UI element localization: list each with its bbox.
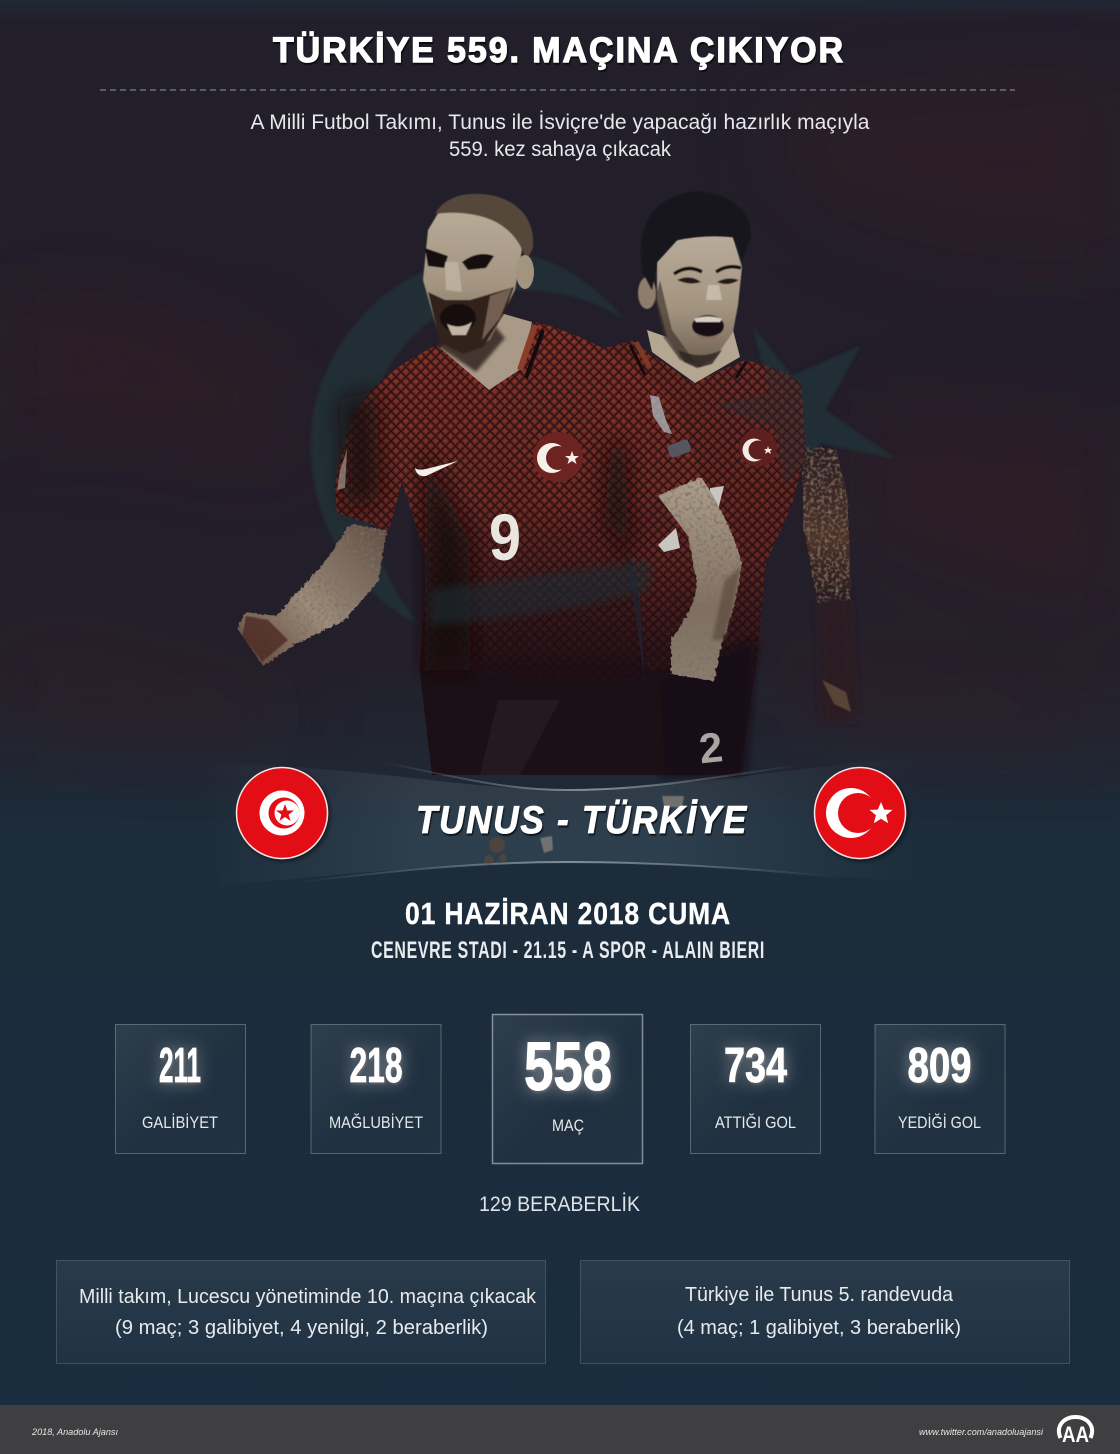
info panel: Lucescu record: Milli takım, Lucescu yönetiminde 10. maçına çıkacak: [79, 1286, 537, 1308]
info panel: Türkiye vs Tunisia record: (4 maç; 1 galibiyet, 3 beraberlik): [677, 1317, 961, 1339]
eye sockets: [425, 248, 494, 270]
player: front player: [237, 194, 742, 775]
subtitle: [250, 111, 870, 161]
beard and jaw shadow: [428, 287, 514, 354]
match heading: TUNUS - TÜRKİYE: [416, 799, 748, 842]
copyright: 2018, Anadolu Ajansı: [31, 1427, 118, 1438]
back player neck: [647, 330, 740, 383]
stat card: losses: MAĞLUBİYET: [329, 1113, 423, 1132]
stat card: goals scored: 734: [724, 1039, 787, 1093]
subtitle: A Milli Futbol Takımı, Tunus ile İsviçre'de yapacağı hazırlık maçıyla: [250, 111, 870, 134]
nike swoosh: [415, 461, 458, 476]
illustration: two Turkish players celebrating: [237, 192, 856, 775]
front player neck: [440, 310, 532, 390]
stat card: wins: 211: [159, 1039, 201, 1093]
stat card: wins: [116, 1024, 246, 1154]
front player head: [423, 208, 525, 354]
twitter link text: www.twitter.com/anadoluajansi: [919, 1427, 1044, 1438]
stat card: goals conceded: YEDİĞİ GOL: [898, 1113, 981, 1132]
info panel: Lucescu record: [56, 1260, 546, 1364]
front player right arm: [658, 477, 742, 681]
flag: Türkiye: [814, 768, 906, 858]
competition sleeve logos: [650, 395, 672, 434]
front player collar: [520, 325, 535, 370]
info panel: Türkiye vs Tunisia record: Türkiye ile Tunus 5. randevuda: [685, 1284, 954, 1306]
match details: CENEVRE STADI - 21.15 - A SPOR - ALAIN BIERI: [371, 937, 765, 964]
draws note: 129 BERABERLİK: [479, 1193, 640, 1216]
front player ear: [516, 255, 534, 289]
front player hair: [435, 194, 533, 262]
stat card: matches: MAÇ: [552, 1116, 584, 1135]
star overlay on the back player's shoulder: [715, 327, 896, 486]
stat card: losses: [311, 1024, 441, 1154]
back player shorts number: 2: [697, 723, 725, 772]
stat card: goals scored: ATTIĞI GOL: [715, 1113, 796, 1132]
match date: 01 HAZİRAN 2018 CUMA: [405, 896, 731, 931]
nose: [445, 262, 462, 292]
footer bar: [0, 1405, 1120, 1454]
info panel: Türkiye vs Tunisia record: [580, 1260, 1070, 1364]
stat card: goals scored: [690, 1024, 820, 1154]
front player sleeve patch: [337, 450, 347, 490]
stat card: wins: GALİBİYET: [142, 1113, 218, 1132]
back player shirt number: [658, 486, 724, 552]
front player shorts: [419, 665, 664, 775]
stat card: matches: [492, 1014, 642, 1164]
back player hair: [641, 192, 750, 290]
stat card: goals conceded: 809: [908, 1039, 972, 1093]
front player left arm: [237, 524, 387, 666]
back player badge: [739, 429, 777, 467]
faded crescent and star of the flag: [311, 253, 896, 625]
back player face: [638, 236, 742, 368]
open mouth: [440, 304, 476, 332]
subtitle: 559. kez sahaya çıkacak: [449, 138, 671, 161]
player: back player: [600, 192, 856, 775]
info panel: Lucescu record: (9 maç; 3 galibiyet, 4 yenilgi, 2 beraberlik): [115, 1317, 488, 1339]
icon: Anadolu Agency logo: AA: [1062, 1422, 1089, 1447]
title: TÜRKİYE 559. MAÇINA ÇIKIYOR: [273, 31, 845, 70]
shirt number 9: 9: [489, 500, 521, 574]
background: dark waving flag: [0, 0, 1120, 810]
back player collar: [636, 342, 650, 368]
stat card: goals conceded: [875, 1024, 1005, 1154]
front player jersey: [335, 322, 701, 680]
flag: Tunisia: [236, 768, 328, 858]
front player badge: [533, 432, 583, 482]
match band: [200, 756, 920, 886]
stat card: matches: 558: [524, 1028, 612, 1105]
dirt specks on band: [484, 796, 684, 865]
stat card: losses: 218: [350, 1039, 402, 1093]
